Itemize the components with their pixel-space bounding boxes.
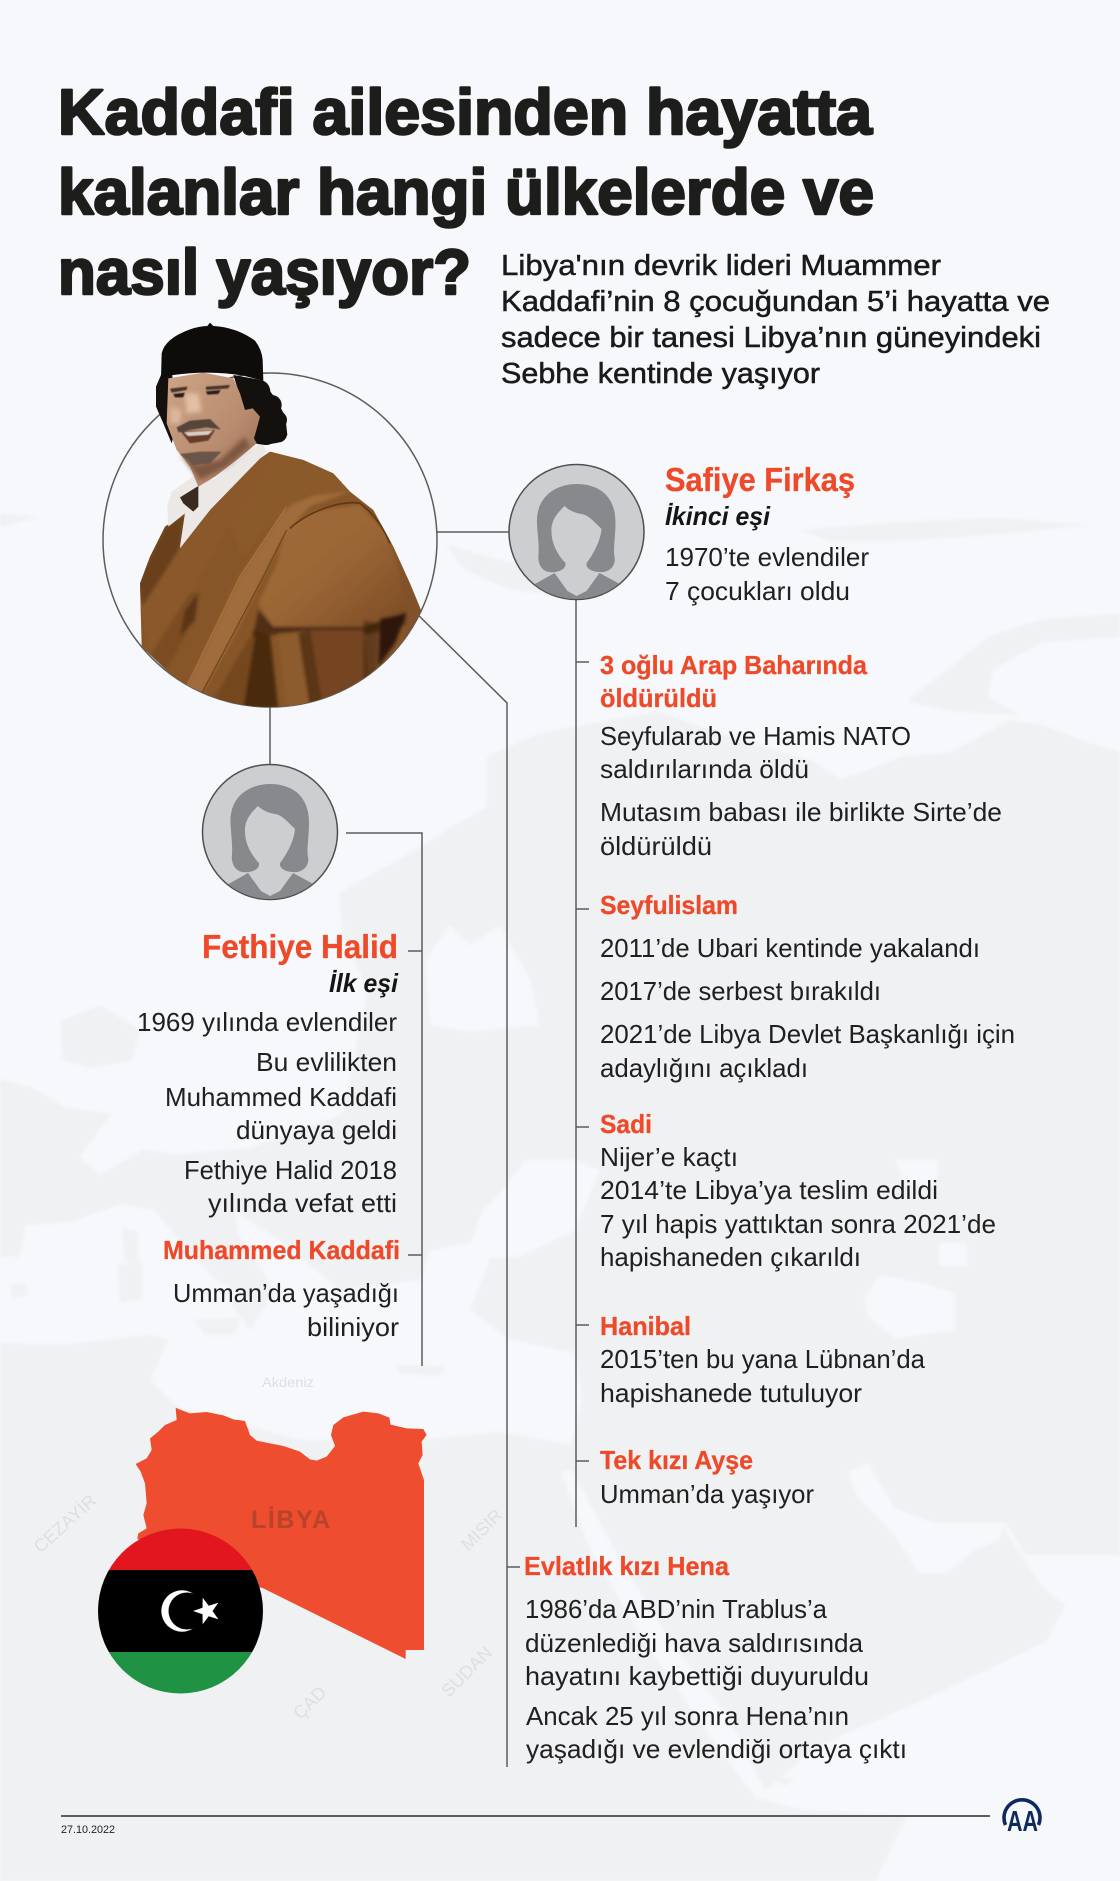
map labels: Akdeniz <box>262 1374 314 1390</box>
map labels: MISIR <box>457 1505 507 1555</box>
panel: Hena: yaşadığı ve evlendiği ortaya çıktı <box>526 1734 907 1764</box>
icon: Safiye Firkaş avatar <box>509 464 644 602</box>
panel: 3 oğlu: Mutasım babası ile birlikte Sirte’de <box>600 797 1002 827</box>
panel: Fethiye Halid: 1969 yılında evlendiler <box>137 1007 397 1037</box>
panel: Safiye Firkaş <box>665 461 869 606</box>
subtitle: Libya'nın devrik lideri Muammer <box>501 250 941 282</box>
subtitle: Sebhe kentinde yaşıyor <box>501 358 820 390</box>
footer rule <box>61 1815 990 1817</box>
map labels <box>30 1374 507 1723</box>
panel: Hena: 1986’da ABD’nin Trablus’a <box>525 1594 828 1624</box>
panel: Sadi: Nijer’e kaçtı <box>600 1142 738 1172</box>
date: 27.10.2022 <box>61 1824 115 1836</box>
panel: Seyfulislam: Seyfulislam <box>600 890 738 920</box>
logo: AA <box>1004 1800 1040 1838</box>
panel: Safiye Firkaş: İkinci eşi <box>665 501 771 531</box>
logo: AA: AA <box>1007 1806 1038 1838</box>
panel: Hena: Evlatlık kızı Hena <box>524 1551 730 1581</box>
panel: Fethiye Halid: Fethiye Halid 2018 <box>184 1155 397 1185</box>
panel: Ayşe: Tek kızı Ayşe <box>600 1445 753 1475</box>
map labels: ÇAD <box>289 1682 330 1723</box>
panel: Seyfulislam: 2011’de Ubari kentinde yakalandı <box>600 933 980 963</box>
connector lines <box>103 373 589 1767</box>
panel: Hanibal: hapishanede tutuluyor <box>600 1378 862 1408</box>
hat <box>161 323 263 381</box>
photo: Muammer Kaddafi <box>130 323 430 717</box>
panel: Hena <box>524 1551 907 1764</box>
panel: Hanibal: 2015’ten bu yana Lübnan’da <box>600 1344 926 1374</box>
title: nasıl yaşıyor? <box>58 236 471 308</box>
panel: 3 oğlu: öldürüldü <box>600 683 717 713</box>
panel: Safiye Firkaş: 7 çocukları oldu <box>665 576 850 606</box>
panel: Fethiye Halid <box>137 928 399 1218</box>
panel: 3 oğlu <box>600 650 1002 861</box>
panel: Fethiye Halid: yılında vefat etti <box>208 1188 397 1218</box>
panel: Ayşe <box>600 1445 814 1509</box>
subtitle <box>501 250 1050 390</box>
panel: Seyfulislam: 2021’de Libya Devlet Başkanlığı için <box>600 1019 1015 1049</box>
panel: Seyfulislam: 2017’de serbest bırakıldı <box>600 976 881 1006</box>
panel: Fethiye Halid: Fethiye Halid <box>202 928 398 965</box>
panel: 3 oğlu: saldırılarında öldü <box>600 754 809 784</box>
title: Kaddafi ailesinden hayatta <box>58 76 872 148</box>
icon: Fethiye Halid avatar <box>202 764 338 902</box>
panel: Sadi: 7 yıl hapis yattıktan sonra 2021’de <box>600 1209 996 1239</box>
map labels: CEZAYİR <box>30 1490 100 1557</box>
icon: Libyan flag <box>98 1528 263 1694</box>
panel: Sadi: hapishaneden çıkarıldı <box>600 1242 861 1272</box>
panel: Fethiye Halid: Bu evlilikten <box>256 1047 397 1077</box>
panel: 3 oğlu: Seyfularab ve Hamis NATO <box>600 721 911 751</box>
panel: Safiye Firkaş: Safiye Firkaş <box>665 461 855 498</box>
panel: Hena: düzenlediği hava saldırısında <box>525 1628 864 1658</box>
map labels: SUDAN <box>437 1642 496 1701</box>
panel: Muhammed Kaddafi <box>163 1235 400 1342</box>
panel: 3 oğlu: öldürüldü <box>600 831 712 861</box>
robe <box>140 452 422 707</box>
panel: Ayşe: Umman’da yaşıyor <box>600 1479 814 1509</box>
subtitle: Kaddafi’nin 8 çocuğundan 5’i hayatta ve <box>501 286 1050 318</box>
panel: Muhammed Kaddafi: Umman’da yaşadığı <box>173 1278 399 1308</box>
panel: Fethiye Halid: dünyaya geldi <box>236 1115 397 1145</box>
title: kalanlar hangi ülkelerde ve <box>58 156 874 228</box>
panel: Fethiye Halid: İlk eşi <box>329 968 399 998</box>
title <box>58 76 874 308</box>
panel: 3 oğlu: 3 oğlu Arap Baharında <box>600 650 868 680</box>
face <box>167 373 260 487</box>
panel: Hanibal <box>600 1311 926 1408</box>
panel: Sadi: 2014’te Libya’ya teslim edildi <box>600 1175 938 1205</box>
panel: Muhammed Kaddafi: Muhammed Kaddafi <box>163 1235 400 1265</box>
panel: Muhammed Kaddafi: biliniyor <box>307 1312 399 1342</box>
panel: Fethiye Halid: Muhammed Kaddafi <box>165 1082 397 1112</box>
shirt <box>167 442 267 548</box>
panel: Sadi <box>600 1109 996 1272</box>
hair <box>156 373 287 445</box>
panel: Seyfulislam: adaylığını açıkladı <box>600 1053 808 1083</box>
panel: Hena: hayatını kaybettiği duyuruldu <box>525 1661 869 1691</box>
panel: Seyfulislam <box>600 890 1015 1083</box>
label: Libya: LİBYA <box>251 1506 330 1534</box>
panel: Hanibal: Hanibal <box>600 1311 691 1341</box>
panel: Hena: Ancak 25 yıl sonra Hena’nın <box>526 1701 849 1731</box>
subtitle: sadece bir tanesi Libya’nın güneyindeki <box>501 322 1041 354</box>
map: Libya <box>136 1408 427 1659</box>
panel: Safiye Firkaş: 1970’te evlendiler <box>665 542 869 572</box>
panel: Sadi: Sadi <box>600 1109 652 1139</box>
